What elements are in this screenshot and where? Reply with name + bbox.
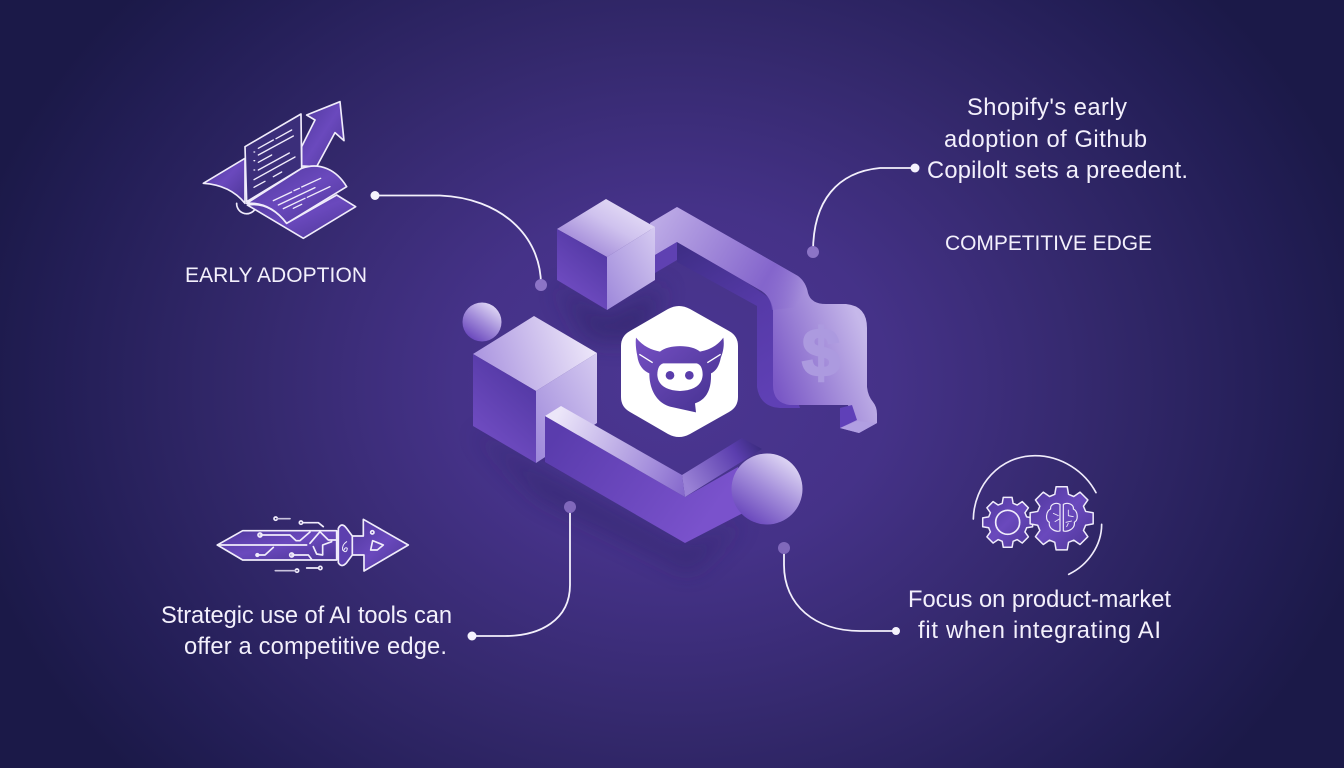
lower ribbon	[545, 406, 762, 543]
text: shopify callout: Copilolt sets a preedent.	[927, 158, 1188, 184]
small sphere	[462, 302, 502, 342]
text: product-market fit: Focus on product-market	[908, 587, 1171, 613]
upper ribbon with dollar panel	[650, 207, 877, 433]
text: shopify callout: adoption of Github	[944, 127, 1147, 153]
connector: strategic use	[468, 501, 576, 640]
connector: product-market fit	[778, 542, 900, 635]
top cube	[557, 199, 655, 310]
icon: circuit sword	[217, 517, 408, 572]
text: product-market fit	[908, 587, 1171, 644]
left cube	[473, 316, 597, 463]
text: shopify callout: Shopify's early	[967, 95, 1127, 121]
soft shadows	[473, 285, 745, 570]
icon: book with arrow	[203, 102, 356, 238]
logo badge	[621, 306, 738, 437]
central isometric illustration	[462, 199, 877, 570]
text: shopify callout	[927, 95, 1188, 184]
text: strategic use	[161, 603, 452, 660]
dollar sign: $	[802, 315, 840, 391]
text: product-market fit: fit when integrating AI	[918, 618, 1161, 644]
owl mascot	[636, 338, 724, 412]
label: early adoption: EARLY ADOPTION	[185, 264, 367, 287]
icon: gears with brain	[973, 456, 1102, 574]
label: competitive edge: COMPETITIVE EDGE	[945, 232, 1152, 255]
text: strategic use: offer a competitive edge.	[184, 634, 447, 660]
connector: shopify	[807, 164, 920, 258]
large sphere	[732, 454, 802, 524]
text: strategic use: Strategic use of AI tools can	[161, 603, 452, 629]
connector: early adoption	[370, 191, 547, 291]
